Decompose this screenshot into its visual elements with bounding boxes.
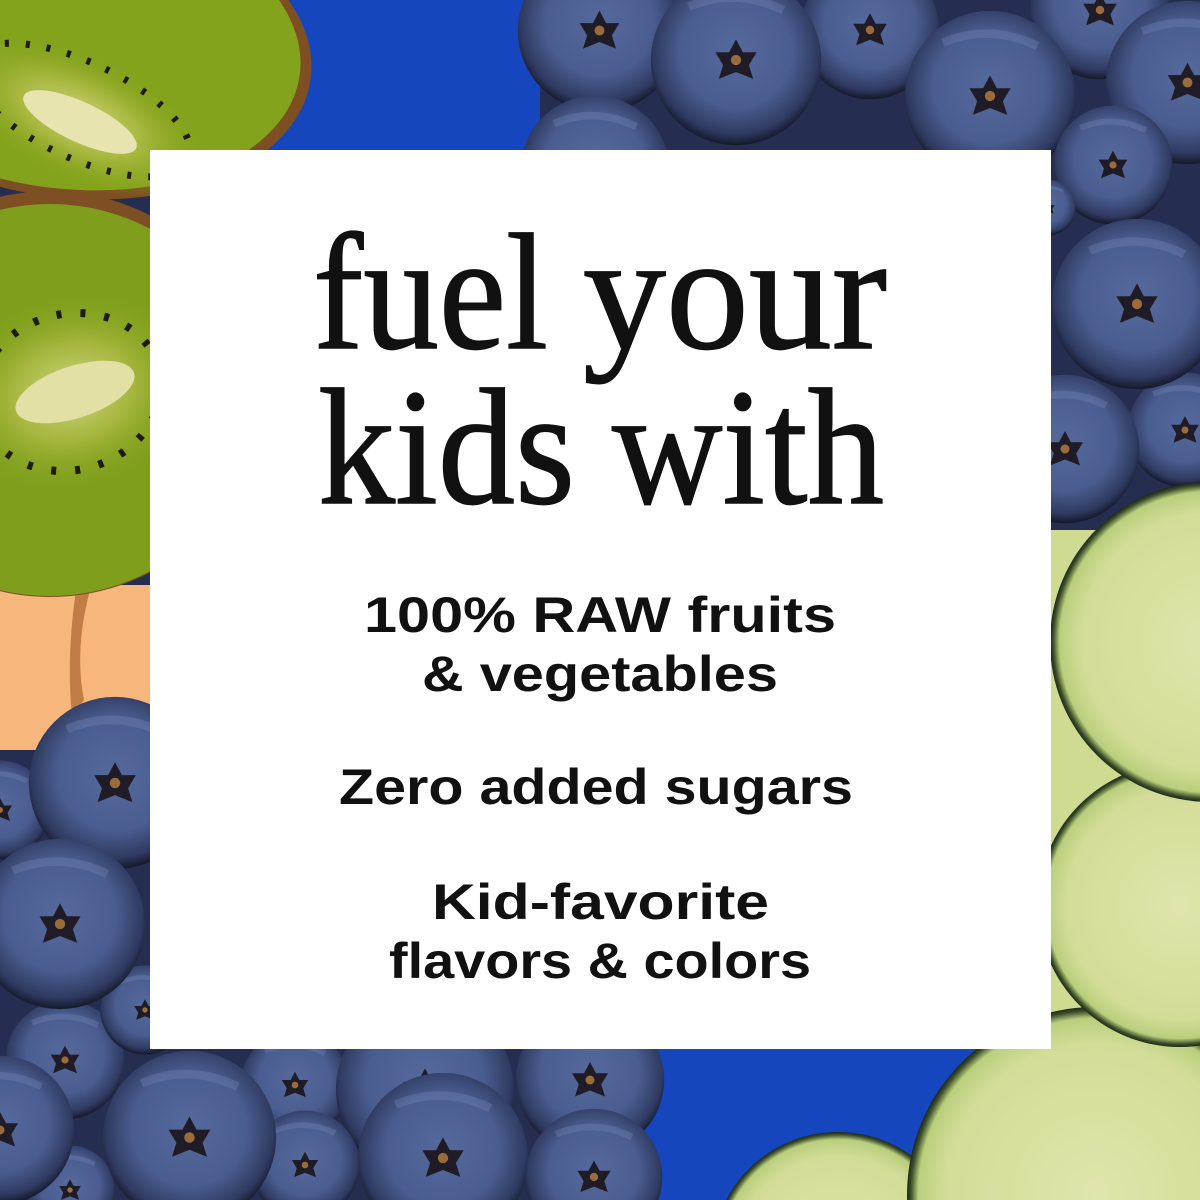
benefit: kid-favorite flavors and colors: Kid-favorite [432, 874, 769, 930]
kiwi slice middle left [0, 191, 260, 597]
blueberries top and right [518, 0, 1200, 523]
heading: your [583, 200, 887, 384]
white text panel [150, 150, 1051, 1049]
benefit: kid-favorite flavors and colors [389, 874, 811, 989]
blueberries left and bottom [0, 697, 664, 1200]
blue spirulina powder bottom [640, 1040, 980, 1200]
benefit: raw fruits and vegetables: & vegetables [422, 646, 778, 702]
benefit: raw fruits and vegetables [364, 587, 836, 702]
kiwi slice top left [0, 0, 332, 231]
blue spirulina powder top [260, 0, 540, 160]
benefit: kid-favorite flavors and colors: flavors & colors [389, 933, 811, 989]
heading: fuel [313, 200, 548, 384]
peach slices left [0, 585, 150, 750]
cucumber slices right and bottom [712, 482, 1200, 1200]
heading: kids [318, 355, 575, 539]
heading [313, 200, 887, 539]
benefit: zero added sugars: Zero added sugars [339, 759, 853, 815]
benefit: raw fruits and vegetables: 100% RAW fruits [364, 587, 836, 643]
heading: with [612, 355, 884, 539]
